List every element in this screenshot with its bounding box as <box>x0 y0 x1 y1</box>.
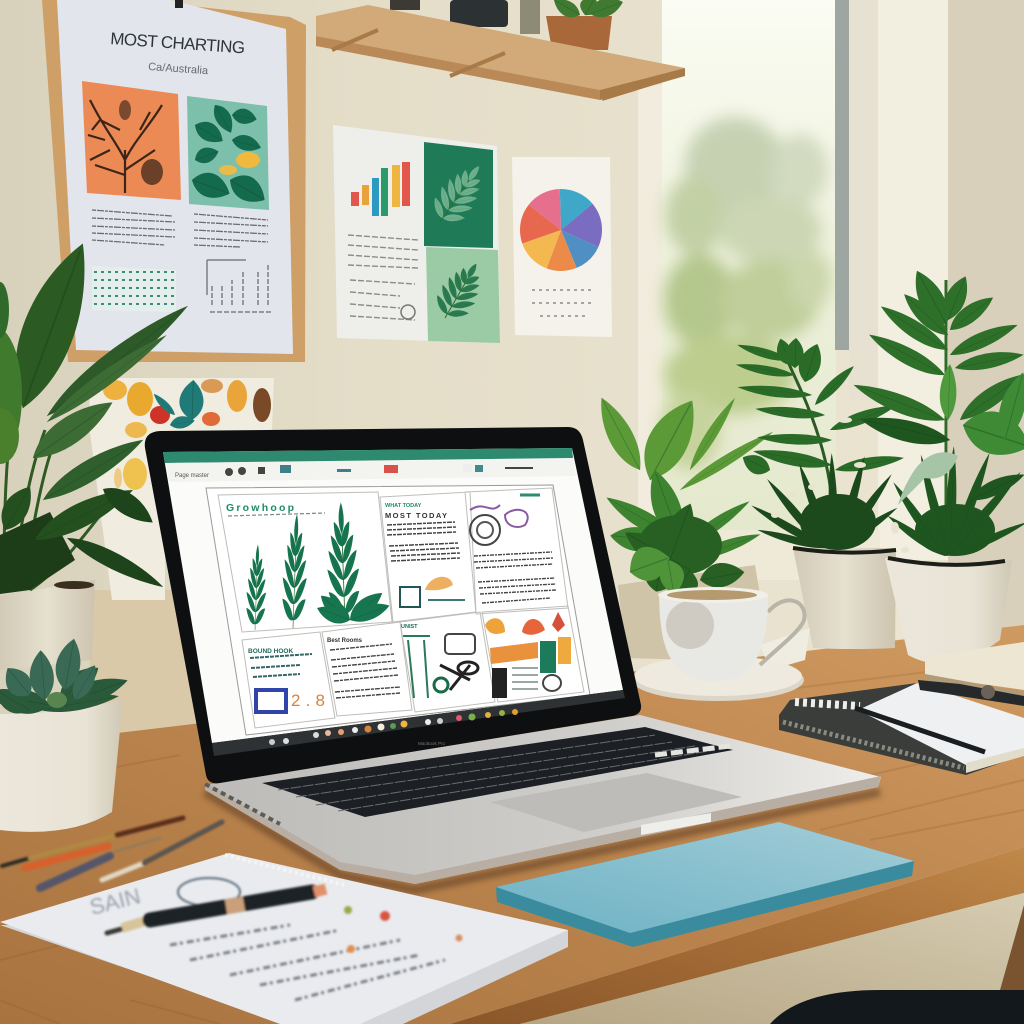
closed book right <box>925 642 1024 698</box>
poster: colour wheel <box>512 157 612 337</box>
orange botanical tile <box>82 81 181 200</box>
botanical plants on screen <box>244 502 392 630</box>
panel: text and sketch <box>385 503 465 607</box>
desk <box>0 625 1024 1024</box>
plant: palm right <box>850 266 1024 664</box>
notes <box>170 925 445 1000</box>
pen on notebook <box>855 708 985 752</box>
spiral notebook right <box>779 680 1024 775</box>
panel: text and sketch: WHAT TODAY <box>385 503 422 509</box>
poster dotted chart <box>92 266 176 312</box>
plant: large left <box>0 234 194 670</box>
panel: bottom text: Best Rooms <box>327 638 363 644</box>
pot <box>0 699 123 832</box>
sketch notebook <box>0 853 568 1024</box>
panel: bottom text <box>327 638 400 698</box>
shadow <box>205 792 880 890</box>
teal closed notebook <box>496 822 914 947</box>
pot <box>885 558 1012 664</box>
green botanical tile <box>187 96 271 210</box>
poster: floral print <box>89 378 274 600</box>
pot <box>0 580 95 670</box>
handwritten heading: SAIN <box>87 883 143 920</box>
plant: succulent in pot <box>0 636 131 832</box>
toolbar: Page master <box>175 473 209 479</box>
poster text blocks <box>92 210 268 247</box>
title bar <box>163 448 573 463</box>
panel: bottom left: BOUND HOOK <box>248 648 293 655</box>
panel: bottom charts <box>401 624 478 698</box>
chair <box>770 990 1024 1024</box>
screen <box>163 448 625 756</box>
wall low left <box>90 590 200 740</box>
brushes <box>2 818 222 888</box>
poster: botanical chart <box>42 0 306 362</box>
items on shelf <box>390 0 626 50</box>
keyboard <box>262 727 733 817</box>
plant: broad-leaf right back <box>590 390 776 660</box>
pen <box>107 889 326 933</box>
laptop base <box>205 715 881 884</box>
laptop <box>145 427 881 890</box>
laptop brand: MacBook Pro <box>418 741 446 746</box>
poster subtitle: Ca/Australia <box>148 61 209 77</box>
pot <box>793 548 896 649</box>
document page <box>206 485 590 735</box>
shelf <box>316 0 685 100</box>
mini bar chart <box>351 162 410 216</box>
clip <box>918 680 1024 706</box>
poster title: MOST CHARTING <box>110 29 246 57</box>
panel: bottom left <box>248 648 325 712</box>
plant: fern middle <box>735 336 905 649</box>
dark base <box>0 512 75 594</box>
pie wheel <box>540 210 582 250</box>
panel heading: growth: Growhoop <box>226 502 294 514</box>
screen bezel <box>145 427 641 783</box>
panel: text and sketch: MOST TODAY <box>385 511 447 520</box>
trackpad <box>490 773 742 832</box>
pale leaf <box>898 452 958 505</box>
dock <box>212 690 625 756</box>
toolbar <box>166 459 576 482</box>
poster: charts sheet <box>333 125 500 343</box>
number doodle: 2.8 <box>291 691 325 710</box>
panel: bottom infographic <box>485 612 571 698</box>
panel: bottom charts: UNIST <box>401 624 418 630</box>
window <box>638 0 1024 640</box>
coffee cup and saucer <box>632 587 810 701</box>
poster line chart <box>207 260 272 312</box>
panel: doodle rings <box>470 495 556 603</box>
